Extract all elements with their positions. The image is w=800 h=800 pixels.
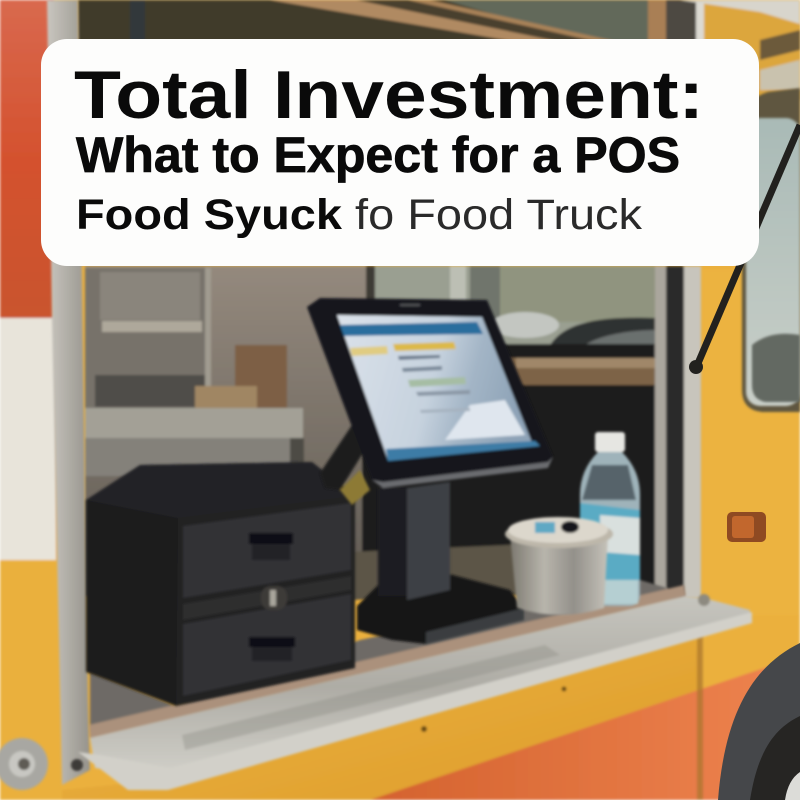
title line 1: Total Investment: [74, 57, 704, 133]
stand base tray [357, 574, 524, 644]
window interior [85, 266, 701, 600]
water bottle [580, 432, 640, 606]
top strip above title: interior, awning and beams [78, 0, 800, 100]
window frame [0, 0, 90, 790]
title line 2: What to Expect for a POS [76, 127, 680, 183]
truck right side window [689, 88, 800, 800]
screen [337, 315, 540, 461]
tablet bezel [307, 298, 553, 488]
lock [261, 586, 287, 610]
POS terminal [307, 298, 553, 644]
background window view [375, 266, 656, 360]
title line 3: Food Syuck fo Food Truck [76, 191, 643, 239]
upper drawer [183, 503, 351, 598]
shelf [71, 580, 752, 790]
metal cup [505, 517, 613, 615]
stand column [378, 482, 450, 600]
cash drawer [86, 462, 355, 706]
title card [41, 39, 759, 266]
lower drawer [183, 594, 351, 696]
wheel arch and tyre [718, 643, 800, 800]
